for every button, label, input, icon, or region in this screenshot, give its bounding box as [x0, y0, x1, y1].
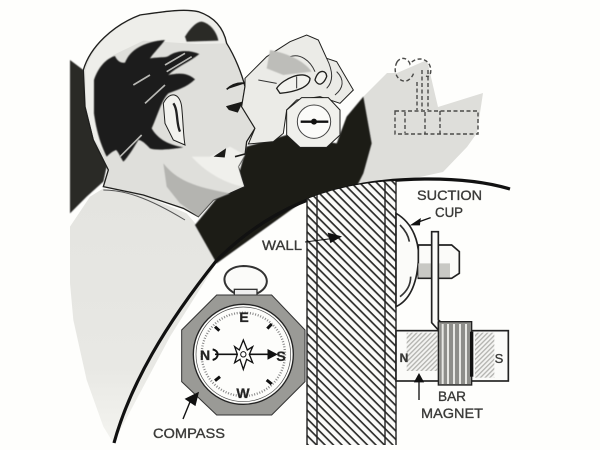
magnet N hatch — [407, 333, 437, 371]
magnet S hatch — [475, 333, 494, 378]
compass needle — [215, 350, 276, 358]
compass crescent — [213, 349, 218, 360]
hand — [242, 35, 353, 144]
compass dial — [193, 304, 293, 404]
hair — [94, 40, 199, 162]
compass dial letters — [200, 309, 286, 401]
ear inner — [173, 103, 180, 132]
bracket coil block — [438, 322, 472, 385]
compass octagon case — [182, 295, 305, 415]
screw thread — [418, 263, 450, 277]
cheek mark and mouth — [216, 150, 245, 157]
wall paper patch behind man — [340, 60, 483, 192]
suction cup — [396, 213, 419, 307]
label: suction cup — [417, 187, 482, 220]
body — [70, 188, 218, 443]
neck shading — [163, 163, 230, 217]
cheek highlight — [192, 147, 245, 187]
bar magnet — [396, 331, 508, 381]
compass diagonal marks — [215, 324, 272, 384]
compass dial letters: E — [239, 309, 249, 325]
hair top streak — [185, 22, 218, 42]
curved vignette line — [114, 179, 510, 443]
dark shadow on wall — [195, 97, 372, 263]
magnet letter S: S — [495, 351, 504, 366]
collar line — [103, 190, 185, 220]
label: bar magnet — [421, 388, 483, 421]
label: bar magnet: BAR — [438, 388, 466, 404]
label: wall: WALL — [262, 237, 302, 253]
compass ring — [224, 266, 267, 293]
head — [83, 10, 255, 217]
compass — [182, 266, 305, 415]
screw stem — [418, 245, 459, 278]
facial features — [227, 83, 245, 112]
compass dial letters: S — [276, 348, 286, 364]
magnet letter N: N — [400, 351, 408, 365]
coil stripes — [443, 324, 466, 384]
compass dial letters: N — [200, 347, 210, 363]
ear and face shadow — [163, 95, 185, 145]
label: suction cup: CUP — [435, 204, 463, 220]
label: suction cup: SUCTION — [417, 187, 482, 203]
wall hatch fill — [307, 181, 396, 445]
suction cup highlights — [400, 225, 411, 297]
magnet arrow — [415, 374, 423, 400]
hand shading — [267, 50, 312, 75]
fingers — [277, 71, 327, 93]
label: bar magnet: MAGNET — [421, 405, 483, 421]
compass arrow — [183, 393, 198, 419]
dark background left of head — [70, 60, 107, 213]
ghost outline of hidden magnet — [395, 58, 478, 134]
wall cross-section — [307, 181, 396, 445]
coil dark edge — [470, 332, 473, 377]
suction cup and magnet assembly — [305, 213, 508, 400]
compass star — [235, 340, 253, 369]
finger lines — [258, 56, 342, 95]
man figure — [70, 10, 372, 443]
small compass in hand — [287, 98, 340, 147]
hair streak highlights — [120, 53, 192, 157]
compass dial letters: W — [236, 385, 250, 401]
suction cup arrow — [412, 218, 431, 225]
compass stem — [234, 289, 257, 296]
wall arrow — [305, 233, 341, 242]
bracket strip — [432, 232, 442, 330]
hair highlight band — [85, 11, 225, 157]
label: compass: COMPASS — [153, 425, 225, 441]
